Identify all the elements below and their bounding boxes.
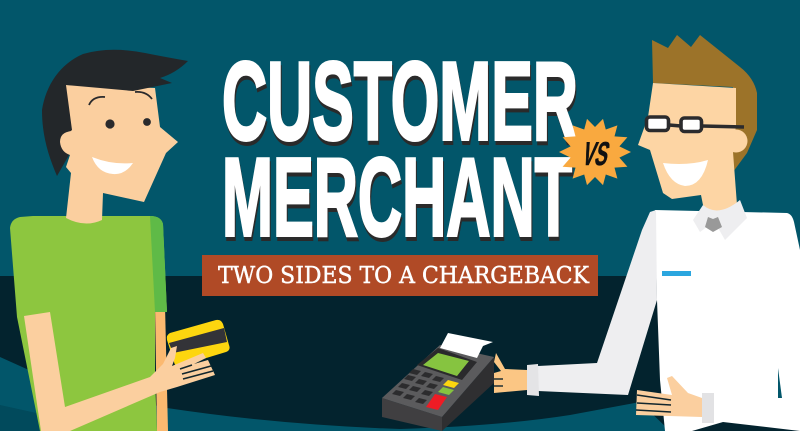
merchant hand right xyxy=(636,376,702,417)
vs starburst badge xyxy=(559,119,631,185)
merchant cuff left xyxy=(527,364,539,396)
card terminal xyxy=(382,333,494,431)
credit card xyxy=(167,320,230,366)
merchant smile xyxy=(663,160,708,186)
customer arm and hand xyxy=(24,312,215,431)
terminal screen xyxy=(423,353,469,376)
customer neck and face xyxy=(66,85,178,224)
customer ear xyxy=(60,131,74,155)
customer far arm xyxy=(155,305,168,431)
customer smile xyxy=(92,157,133,174)
subtitle banner xyxy=(202,255,598,296)
yellow button xyxy=(443,380,459,388)
merchant ear xyxy=(724,130,748,152)
coat slit xyxy=(778,368,782,398)
subtitle banner: TWO SIDES TO A CHARGEBACK xyxy=(218,263,590,289)
red button xyxy=(426,394,447,410)
merchant coat xyxy=(655,210,800,431)
customer character xyxy=(10,50,230,431)
receipt paper xyxy=(440,333,493,358)
glasses xyxy=(646,117,744,132)
green button xyxy=(438,387,454,395)
merchant character xyxy=(382,35,800,431)
keypad xyxy=(392,369,444,404)
customer eyes xyxy=(105,118,151,129)
customer brows xyxy=(89,92,152,105)
name badge xyxy=(662,271,691,276)
merchant hair xyxy=(652,35,757,172)
merchant hand left xyxy=(494,353,527,393)
finger lines xyxy=(180,365,213,379)
merchant cuff right xyxy=(702,393,714,423)
merchant collar xyxy=(693,200,747,240)
customer shirt xyxy=(10,216,167,431)
merchant neck and face xyxy=(638,83,737,214)
vs starburst badge: VS xyxy=(579,136,613,173)
merchant tie xyxy=(705,217,722,232)
dark floor band xyxy=(0,276,800,431)
customer hair xyxy=(42,50,188,176)
merchant sleeve xyxy=(538,210,657,395)
shirt shade xyxy=(150,216,167,312)
